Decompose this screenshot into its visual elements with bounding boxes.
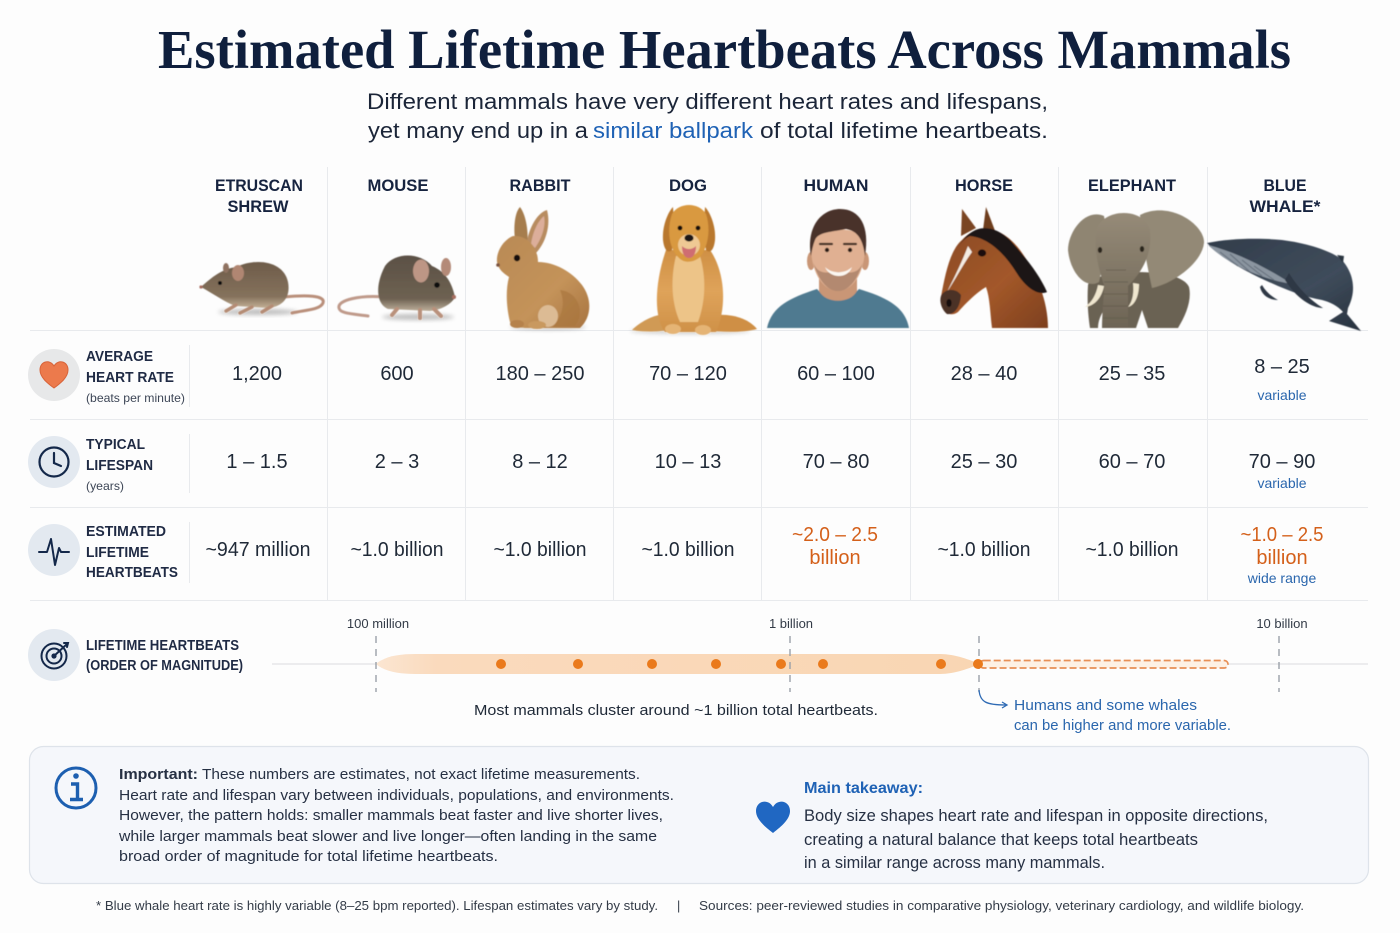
subtitle: of total lifetime heartbeats. (760, 118, 1048, 143)
footnote (96, 899, 1304, 913)
important text: broad order of magnitude for total lifetime heartbeats. (119, 848, 498, 865)
main takeaway: Main takeaway: (804, 780, 923, 797)
important text: Heart rate and lifespan vary between individuals, populations, and environments. (119, 787, 674, 804)
row: estimated lifetime heartbeats: wide range (1247, 570, 1316, 586)
icon: pulse (28, 524, 80, 576)
illustration: elephant (1068, 210, 1204, 328)
row: estimated lifetime heartbeats: LIFETIME (86, 545, 149, 561)
row: estimated lifetime heartbeats: ~2.0 – 2.5 (792, 524, 878, 546)
important text: Important: (119, 766, 198, 783)
row: estimated lifetime heartbeats: ~1.0 billion (642, 539, 734, 561)
row: average heart rate: 28 – 40 (951, 363, 1017, 385)
row: average heart rate: 180 – 250 (496, 363, 584, 385)
variable note: can be higher and more variable. (1014, 717, 1231, 734)
column headers: WHALE* (1250, 197, 1321, 216)
important text: However, the pattern holds: smaller mammals beat faster and live shorter lives, (119, 807, 663, 824)
row: estimated lifetime heartbeats: ESTIMATED (86, 524, 166, 540)
row: estimated lifetime heartbeats: billion (1256, 547, 1308, 569)
arrow (979, 690, 1007, 708)
icon: heart (28, 349, 80, 401)
column headers: ETRUSCAN (215, 176, 303, 195)
illustration: etruscan shrew (199, 262, 323, 315)
main takeaway: in a similar range across many mammals. (804, 854, 1105, 872)
row: estimated lifetime heartbeats: billion (809, 547, 861, 569)
row: typical lifespan: 1 – 1.5 (226, 451, 288, 473)
row: estimated lifetime heartbeats: ~1.0 billion (938, 539, 1030, 561)
main takeaway: Body size shapes heart rate and lifespan in opposite directions, (804, 807, 1268, 825)
row: average heart rate: AVERAGE (86, 349, 153, 365)
column headers (215, 176, 1321, 216)
icon: info (56, 768, 96, 808)
row: typical lifespan: 10 – 13 (655, 451, 721, 473)
subtitle: similar ballpark (593, 118, 754, 143)
column headers: DOG (669, 176, 707, 195)
footnote: * Blue whale heart rate is highly variable (8–25 bpm reported). Lifespan estimates vary by study. (96, 899, 658, 913)
row: typical lifespan: LIFESPAN (86, 458, 153, 474)
row: estimated lifetime heartbeats: ~1.0 – 2.5 (1240, 524, 1324, 546)
row: typical lifespan (28, 436, 1315, 493)
illustration: dog (630, 205, 757, 335)
column headers: BLUE (1264, 176, 1306, 195)
footnote: | (677, 899, 680, 913)
ticks (376, 636, 1279, 692)
illustration: mouse (339, 256, 456, 320)
row: typical lifespan: 70 – 80 (803, 451, 869, 473)
illustration: rabbit (496, 207, 589, 330)
main takeaway: creating a natural balance that keeps total heartbeats (804, 831, 1198, 849)
subtitle (367, 89, 1048, 143)
illustration: blue whale (1207, 239, 1361, 331)
row: typical lifespan: variable (1257, 475, 1307, 491)
row: estimated lifetime heartbeats (28, 524, 1324, 586)
row: average heart rate: 25 – 35 (1099, 363, 1165, 385)
row: average heart rate: 1,200 (232, 363, 282, 385)
column headers: HORSE (955, 176, 1013, 195)
row: average heart rate: (beats per minute) (86, 391, 185, 405)
row: average heart rate: 70 – 120 (649, 363, 727, 385)
row: average heart rate: HEART RATE (86, 370, 174, 386)
column headers: RABBIT (510, 176, 571, 195)
row: typical lifespan: 70 – 90 (1249, 451, 1315, 473)
row: average heart rate: 8 – 25 (1254, 356, 1310, 378)
row: estimated lifetime heartbeats: ~1.0 billion (1086, 539, 1178, 561)
important text: while larger mammals beat slower and live longer—often landing in the same (118, 828, 657, 845)
variable range dashed (980, 660, 1228, 668)
panel: notes (30, 746, 1368, 884)
title: Estimated Lifetime Heartbeats Across Mammals (158, 19, 1291, 80)
column headers: HUMAN (804, 176, 868, 195)
row: average heart rate: variable (1257, 387, 1307, 403)
main takeaway (804, 780, 1268, 872)
row: estimated lifetime heartbeats: ~1.0 billion (350, 539, 444, 561)
subtitle: yet many end up in a (368, 118, 589, 143)
row: average heart rate (28, 349, 1310, 405)
variable note: Humans and some whales (1014, 697, 1197, 714)
row: typical lifespan: 8 – 12 (512, 451, 568, 473)
cluster caption: Most mammals cluster around ~1 billion total heartbeats. (474, 702, 878, 719)
row: average heart rate: 600 (380, 363, 414, 385)
row: estimated lifetime heartbeats: ~947 million (206, 539, 310, 561)
illustration: human (767, 209, 909, 328)
subtitle: Different mammals have very different heart rates and lifespans, (367, 89, 1048, 114)
row: order of magnitude scale: LIFETIME HEARTBEATS (86, 638, 239, 654)
illustration: horse (940, 207, 1048, 328)
row: typical lifespan: 2 – 3 (375, 451, 419, 473)
variable note (1014, 697, 1231, 734)
tick labels: 1 billion (769, 616, 813, 631)
icon: blue heart (756, 802, 790, 833)
important text (118, 766, 674, 865)
tick labels: 100 million (347, 616, 409, 631)
icon: target (28, 629, 80, 681)
tick labels (347, 616, 1308, 631)
row: typical lifespan: 25 – 30 (951, 451, 1017, 473)
footnote: Sources: peer-reviewed studies in comparative physiology, veterinary cardiology, and wildlife biology. (699, 899, 1304, 913)
row: order of magnitude scale (28, 616, 1368, 734)
icon: clock (28, 436, 80, 488)
row: typical lifespan: (years) (86, 479, 124, 493)
column headers: ELEPHANT (1088, 176, 1177, 195)
important text: These numbers are estimates, not exact lifetime measurements. (202, 766, 640, 783)
row: estimated lifetime heartbeats: ~1.0 billion (494, 539, 586, 561)
tick labels: 10 billion (1256, 616, 1308, 631)
scale band (376, 654, 980, 674)
row: estimated lifetime heartbeats: HEARTBEATS (86, 565, 178, 581)
column headers: MOUSE (368, 176, 428, 195)
data points (496, 659, 983, 669)
row: typical lifespan: TYPICAL (86, 437, 145, 453)
row: order of magnitude scale: (ORDER OF MAGNITUDE) (86, 658, 243, 674)
row: average heart rate: 60 – 100 (797, 363, 875, 385)
row: typical lifespan: 60 – 70 (1099, 451, 1165, 473)
column headers: SHREW (228, 197, 289, 216)
